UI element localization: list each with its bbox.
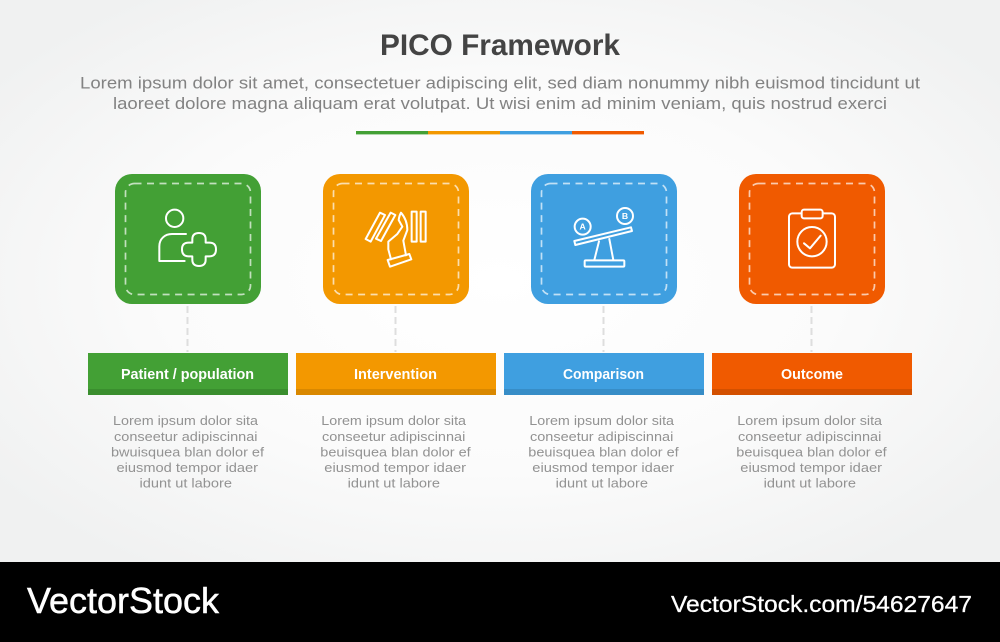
label bar: comparison [504, 353, 704, 395]
description: patient: idunt ut labore [140, 476, 232, 490]
icon card: comparison [531, 174, 677, 304]
description: patient: conseetur adipiscinnai [114, 429, 258, 444]
icon card: outcome [739, 174, 885, 304]
description: intervention: idunt ut labore [348, 476, 440, 490]
icon: hand stopping dominoes [366, 212, 426, 267]
description: patient [111, 413, 264, 490]
description: patient: eiusmod tempor idaer [116, 460, 259, 475]
description: patient: Lorem ipsum dolor sita [113, 413, 259, 428]
icon card: intervention [323, 174, 469, 304]
footer image id: VectorStock.com/54627647 [671, 591, 972, 617]
icon: seesaw with A and B [574, 208, 633, 267]
subtitle text: Lorem ipsum dolor sit amet, consectetuer adipiscing elit, sed diam nonummy nibh euismod tincidunt ut [80, 74, 920, 92]
panel: comparison [504, 174, 704, 490]
panel: intervention [296, 174, 496, 490]
subtitle text [80, 74, 920, 113]
label bar: patient: Patient / population [121, 367, 254, 383]
description: patient: bwuisquea blan dolor ef [111, 444, 264, 460]
icon: person with plus [159, 210, 216, 266]
footer logo text: VectorStock [27, 580, 220, 621]
icon: seesaw with A and B: B [622, 211, 628, 221]
label bar: intervention [296, 353, 496, 395]
description: intervention [320, 413, 471, 490]
description: comparison: Lorem ipsum dolor sita [529, 413, 675, 428]
description: outcome: Lorem ipsum dolor sita [737, 413, 883, 428]
description: comparison: idunt ut labore [556, 476, 648, 490]
panel: outcome [712, 174, 912, 490]
description: comparison: beuisquea blan dolor ef [528, 444, 679, 460]
description: comparison: conseetur adipiscinnai [530, 429, 673, 444]
label bar: patient [88, 353, 288, 395]
panel: patient / population [88, 174, 288, 490]
label bar: outcome [712, 353, 912, 395]
icon: clipboard with check [789, 210, 835, 268]
footer band [0, 562, 1000, 642]
icon card: patient [115, 174, 261, 304]
description: intervention: beuisquea blan dolor ef [320, 444, 471, 460]
icon: seesaw with A and B: A [580, 222, 587, 232]
description: outcome: beuisquea blan dolor ef [736, 444, 887, 460]
description: outcome: eiusmod tempor idaer [740, 460, 883, 475]
description: intervention: conseetur adipiscinnai [322, 429, 465, 444]
description: intervention: Lorem ipsum dolor sita [321, 413, 467, 428]
label bar: intervention: Intervention [354, 367, 437, 383]
description: outcome: idunt ut labore [764, 476, 856, 490]
description: outcome [736, 413, 887, 490]
colored divider bar [356, 131, 644, 134]
title: PICO Framework [380, 29, 620, 62]
description: outcome: conseetur adipiscinnai [738, 429, 881, 444]
subtitle text: laoreet dolore magna aliquam erat volutpat. Ut wisi enim ad minim veniam, quis nostrud exerci [113, 94, 887, 113]
label bar: outcome: Outcome [781, 367, 843, 383]
description: intervention: eiusmod tempor idaer [324, 460, 467, 475]
description: comparison [528, 413, 679, 490]
label bar: comparison: Comparison [563, 367, 644, 383]
description: comparison: eiusmod tempor idaer [532, 460, 675, 475]
